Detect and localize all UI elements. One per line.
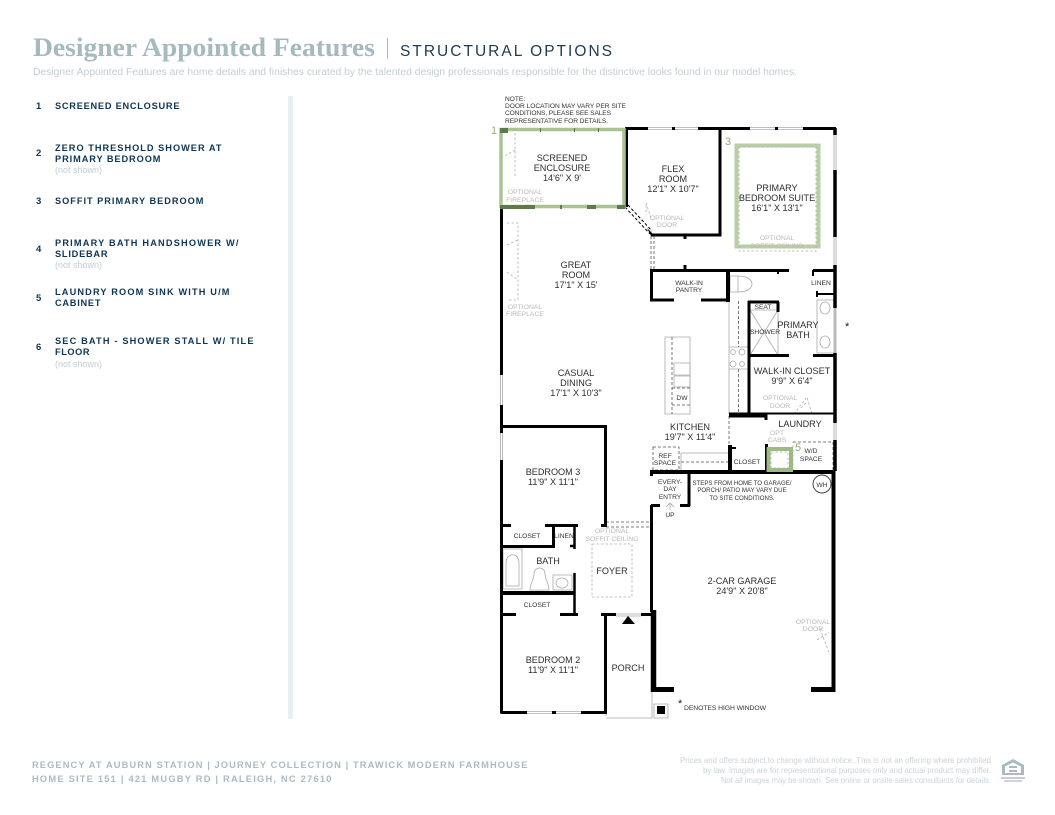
kitchen label: 19'7" X 11'4" — [665, 432, 715, 442]
bedroom 2 label: 11'9" X 11'1" — [528, 665, 578, 675]
optional feature labels: DOOR — [803, 626, 823, 633]
everyday entry label: EVERY- — [658, 479, 682, 486]
vertical divider — [288, 96, 293, 719]
feature 6: SEC BATH - SHOWER STALL W/ TILE — [55, 336, 255, 346]
feature 3: SOFFIT PRIMARY BEDROOM — [55, 196, 205, 206]
flex room label — [647, 164, 699, 194]
screened enclosure label: 14'6" X 9' — [543, 173, 581, 183]
great room label — [554, 260, 598, 290]
window lines — [500, 128, 836, 714]
everyday entry label — [658, 479, 682, 501]
optional feature labels: OPTIONAL — [760, 235, 794, 242]
garage steps note: TO SITE CONDITIONS. — [709, 495, 775, 502]
garage steps note: PORCH/ PATIO MAY VARY DUE — [697, 487, 787, 494]
icon: equal housing — [1001, 759, 1025, 782]
room labels — [514, 153, 831, 675]
feature 2 — [36, 143, 223, 175]
garage label: 2-CAR GARAGE — [708, 576, 776, 586]
feature 5: LAUNDRY ROOM SINK WITH U/M — [55, 287, 231, 297]
casual dining label: DINING — [560, 378, 592, 388]
optional feature labels: OPTIONAL — [508, 304, 542, 311]
walk-in closet label: WALK-IN CLOSET — [754, 366, 831, 376]
feature 6: FLOOR — [55, 347, 91, 357]
screened enclosure label: SCREENED — [537, 153, 588, 163]
legal disclaimer: by law. Images are for representational purposes only and actual product may differ. — [703, 765, 991, 775]
high window markers — [678, 321, 850, 712]
seat label: SEAT — [755, 304, 771, 311]
light fixtures and cabinetry — [500, 128, 836, 718]
closet label: CLOSET — [734, 459, 760, 466]
walk-in closet label — [754, 366, 831, 386]
optional feature labels: DOOR — [657, 222, 677, 229]
primary bath label — [777, 320, 819, 340]
closet label: CLOSET — [524, 602, 550, 609]
dishwasher label: DW — [676, 395, 688, 402]
feature 5: 5 — [36, 293, 42, 304]
w/d space label: SPACE — [800, 456, 823, 463]
linen label: LINEN — [811, 280, 831, 287]
kitchen label — [665, 422, 715, 442]
bedroom 3 label: BEDROOM 3 — [526, 467, 580, 477]
laundry label: LAUNDRY — [778, 419, 822, 429]
footer community info: HOME SITE 151 | 421 MUGBY RD | RALEIGH, NC 27610 — [32, 774, 333, 784]
legal disclaimer: Not all images may be shown. See online or onsite sales consultants for details. — [721, 775, 991, 785]
flex room label: ROOM — [659, 174, 687, 184]
feature 5 — [36, 287, 231, 308]
optional feature labels — [506, 189, 830, 633]
optional feature labels: SOFFIT CEILING — [750, 243, 804, 250]
green highlight: soffit primary bedroom: 3 — [725, 136, 731, 148]
garage steps note: STEPS FROM HOME TO GARAGE/ — [693, 480, 792, 487]
ref space label: SPACE — [654, 460, 677, 467]
optional feature labels: OPTIONAL — [796, 619, 830, 626]
feature 2: (not shown) — [55, 165, 102, 175]
great room label: 17'1" X 15' — [554, 280, 598, 290]
linen label: LINEN — [554, 533, 574, 540]
feature 5: CABINET — [55, 298, 102, 308]
garage label: 24'9" X 20'8" — [716, 586, 768, 596]
legal disclaimer — [680, 755, 991, 785]
door location note: DOOR LOCATION MAY VARY PER SITE — [505, 103, 627, 110]
high window markers: * — [678, 698, 683, 710]
footer community info: REGENCY AT AUBURN STATION | JOURNEY COLLECTION | TRAWICK MODERN FARMHOUSE — [32, 760, 529, 770]
feature 1: 1 — [36, 101, 42, 112]
walk-in pantry label — [675, 280, 703, 294]
casual dining label — [550, 368, 602, 398]
closet label: CLOSET — [514, 533, 540, 540]
primary bedroom suite label: BEDROOM SUITE — [739, 193, 815, 203]
subtitle text: Designer Appointed Features are home details and finishes curated by the talented design professionals responsible for the distinctive looks found in our model homes. — [33, 67, 797, 78]
ref space label: REF — [658, 453, 672, 460]
green highlight: screened enclosure — [491, 125, 625, 209]
flex room label: 12'1" X 10'7" — [647, 184, 699, 194]
w/d space label — [800, 448, 823, 463]
legal disclaimer: Prices and offers subject to change without notice. This is not an offering where prohibited — [680, 755, 991, 765]
optional feature labels: OPT — [770, 430, 784, 437]
screened enclosure label — [534, 153, 590, 183]
feature 2: 2 — [36, 148, 41, 159]
walk-in closet label: 9'9" X 6'4" — [771, 376, 813, 386]
shower label: SHOWER — [750, 329, 780, 336]
everyday entry label: ENTRY — [659, 494, 682, 501]
ref space label — [654, 453, 677, 467]
feature 6: 6 — [36, 342, 41, 353]
w/d space label: W/D — [804, 448, 818, 455]
feature 4: 4 — [36, 244, 42, 255]
water heater label: WH — [816, 482, 828, 489]
feature 4: (not shown) — [55, 260, 102, 270]
primary bedroom suite label: 16'1" X 13'1" — [751, 203, 803, 213]
feature 6 — [36, 336, 255, 369]
feature 4: SLIDEBAR — [55, 249, 109, 259]
casual dining label: 17'1" X 10'3" — [550, 388, 602, 398]
green highlight: soffit primary bedroom — [725, 136, 818, 251]
green highlight: screened enclosure: 1 — [491, 125, 497, 137]
foyer label: FOYER — [596, 566, 628, 576]
green highlight: laundry sink: 5 — [795, 442, 801, 454]
primary bath label: PRIMARY — [777, 320, 819, 330]
feature list — [36, 101, 255, 369]
primary bedroom suite label: PRIMARY — [756, 183, 798, 193]
bedroom 3 label — [526, 467, 580, 487]
up label: UP — [665, 512, 675, 519]
feature 4: PRIMARY BATH HANDSHOWER W/ — [55, 238, 240, 248]
bath label: BATH — [536, 556, 560, 566]
primary bedroom suite label — [739, 183, 815, 213]
optional feature labels: OPTIONAL — [763, 395, 797, 402]
kitchen label: KITCHEN — [670, 422, 710, 432]
title: Designer Appointed Features — [33, 33, 375, 62]
feature 6: (not shown) — [55, 359, 102, 369]
feature 1: SCREENED ENCLOSURE — [55, 101, 181, 111]
optional feature labels: SOFFIT CEILING — [585, 536, 639, 543]
floor plan — [491, 125, 850, 718]
porch label: PORCH — [612, 663, 644, 673]
optional feature labels: DOOR — [770, 403, 790, 410]
optional feature labels: FIREPLACE — [506, 311, 544, 318]
garage label — [708, 576, 776, 596]
optional feature labels: CABS — [768, 437, 787, 444]
walk-in pantry label: PANTRY — [676, 287, 703, 294]
optional feature labels: OPTIONAL — [508, 189, 542, 196]
feature 2: ZERO THRESHOLD SHOWER AT — [55, 143, 223, 153]
great room label: GREAT — [561, 260, 592, 270]
door location note — [505, 96, 627, 125]
high window markers: * — [845, 321, 850, 333]
feature 3: 3 — [36, 196, 41, 207]
title: STRUCTURAL OPTIONS — [400, 43, 612, 60]
bedroom 2 label — [526, 655, 580, 675]
title — [33, 33, 612, 62]
feature 2: PRIMARY BEDROOM — [55, 154, 162, 164]
primary bath label: BATH — [786, 330, 810, 340]
door location note: REPRESENTATIVE FOR DETAILS. — [505, 118, 608, 125]
green highlight: laundry sink — [768, 442, 801, 470]
casual dining label: CASUAL — [558, 368, 594, 378]
screened enclosure label: ENCLOSURE — [534, 163, 590, 173]
door location note: NOTE: — [505, 96, 525, 103]
garage steps note — [693, 480, 792, 502]
footer community info — [32, 760, 529, 784]
door location note: CONDITIONS, PLEASE SEE SALES — [505, 110, 612, 117]
flex room label: FLEX — [662, 164, 684, 174]
structural walls — [501, 128, 836, 714]
feature 4 — [36, 238, 240, 270]
optional feature labels: OPTIONAL — [650, 215, 684, 222]
everyday entry label: DAY — [663, 486, 677, 493]
bedroom 2 label: BEDROOM 2 — [526, 655, 580, 665]
high window markers: DENOTES HIGH WINDOW — [684, 705, 767, 712]
walk-in pantry label: WALK-IN — [675, 280, 703, 287]
optional feature labels: FIREPLACE — [506, 197, 544, 204]
bedroom 3 label: 11'9" X 11'1" — [528, 477, 578, 487]
great room label: ROOM — [562, 270, 590, 280]
optional feature labels: OPTIONAL — [595, 528, 629, 535]
